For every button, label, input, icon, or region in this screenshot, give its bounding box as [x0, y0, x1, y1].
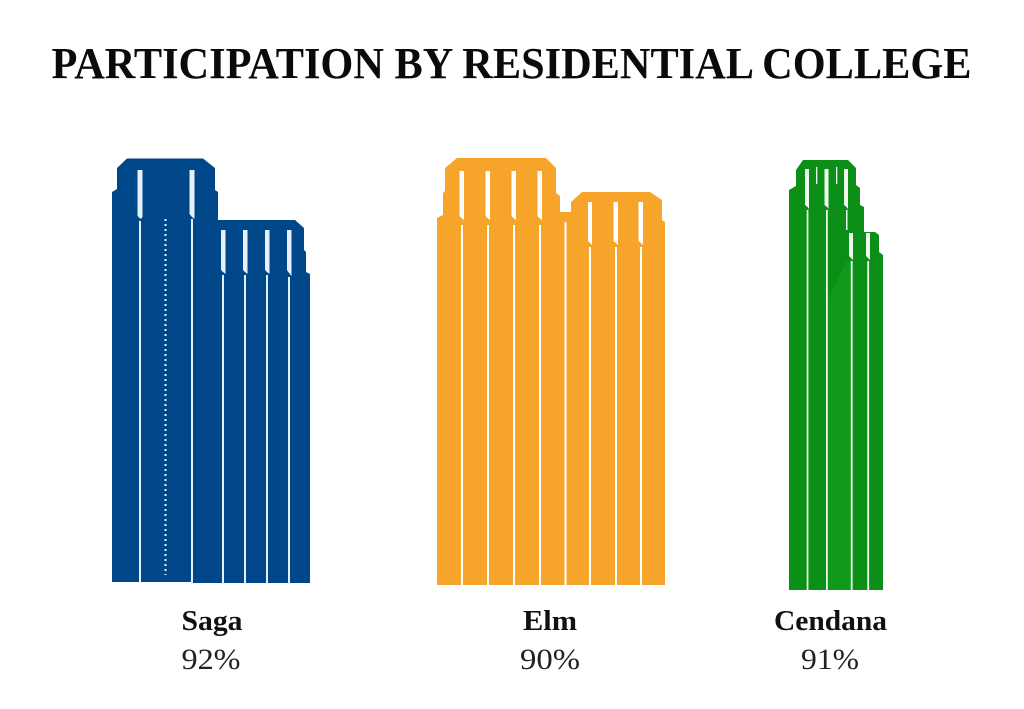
value: Saga 92%: 92%	[182, 643, 240, 676]
value: Cendana 91%: 91%	[801, 643, 859, 676]
title: PARTICIPATION BY RESIDENTIAL COLLEGE	[52, 39, 972, 88]
value: Elm 90%: 90%	[520, 643, 580, 676]
label: Elm: Elm	[523, 606, 577, 637]
label: Cendana: Cendana	[774, 606, 887, 637]
panel: Saga	[112, 158, 310, 676]
icon: Elm tower	[437, 158, 665, 585]
panel: Elm	[437, 158, 665, 676]
panel: Cendana	[774, 160, 887, 676]
label: Saga: Saga	[182, 606, 242, 637]
icon: Saga tower	[112, 158, 310, 584]
icon: Cendana tower	[789, 160, 883, 590]
